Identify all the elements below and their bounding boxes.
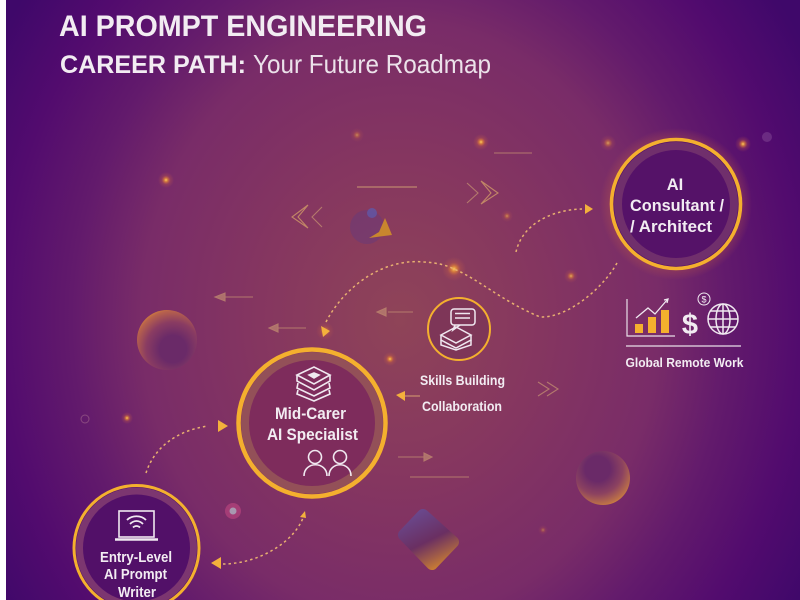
small arrows and chevrons [215, 153, 558, 477]
title: AI PROMPT ENGINEERING [59, 10, 427, 43]
node: AI Consultant / Architect: AI [667, 176, 683, 194]
icons: growth chart, dollar and globe [626, 293, 741, 346]
node: Mid-Career AI Specialist: AI Specialist [267, 426, 358, 444]
label: skills building and collaboration: Skills Building [420, 373, 505, 388]
dashed path connectors [146, 209, 617, 564]
node: Entry-Level AI Prompt Writer: Entry-Level [100, 549, 172, 566]
node: Mid-Career AI Specialist: Mid-Carer [275, 405, 347, 423]
title [59, 10, 491, 79]
decorative spheres and cubes [137, 208, 630, 564]
icons: growth chart, dollar and globe: $ [701, 294, 707, 304]
title: Your Future Roadmap [253, 49, 491, 79]
label: skills building and collaboration: Collaboration [422, 399, 502, 414]
node: Skills Building [428, 298, 490, 360]
node: AI Consultant / Architect: Consultant / [630, 197, 724, 215]
node: Entry-Level AI Prompt Writer [74, 486, 199, 600]
title: CAREER PATH: [60, 51, 246, 79]
node: AI Consultant / Architect: / Architect [630, 218, 713, 236]
label: Global Remote Work: Global Remote Work [626, 355, 744, 370]
icons: growth chart, dollar and globe: $ [682, 309, 698, 341]
node: AI Consultant / Architect [600, 128, 752, 280]
glowing particles [81, 128, 772, 535]
arrowheads [211, 204, 593, 569]
node: Entry-Level AI Prompt Writer: AI Prompt [104, 566, 167, 583]
label: skills building and collaboration [420, 373, 505, 414]
node: Mid-Career AI Specialist [238, 349, 386, 497]
